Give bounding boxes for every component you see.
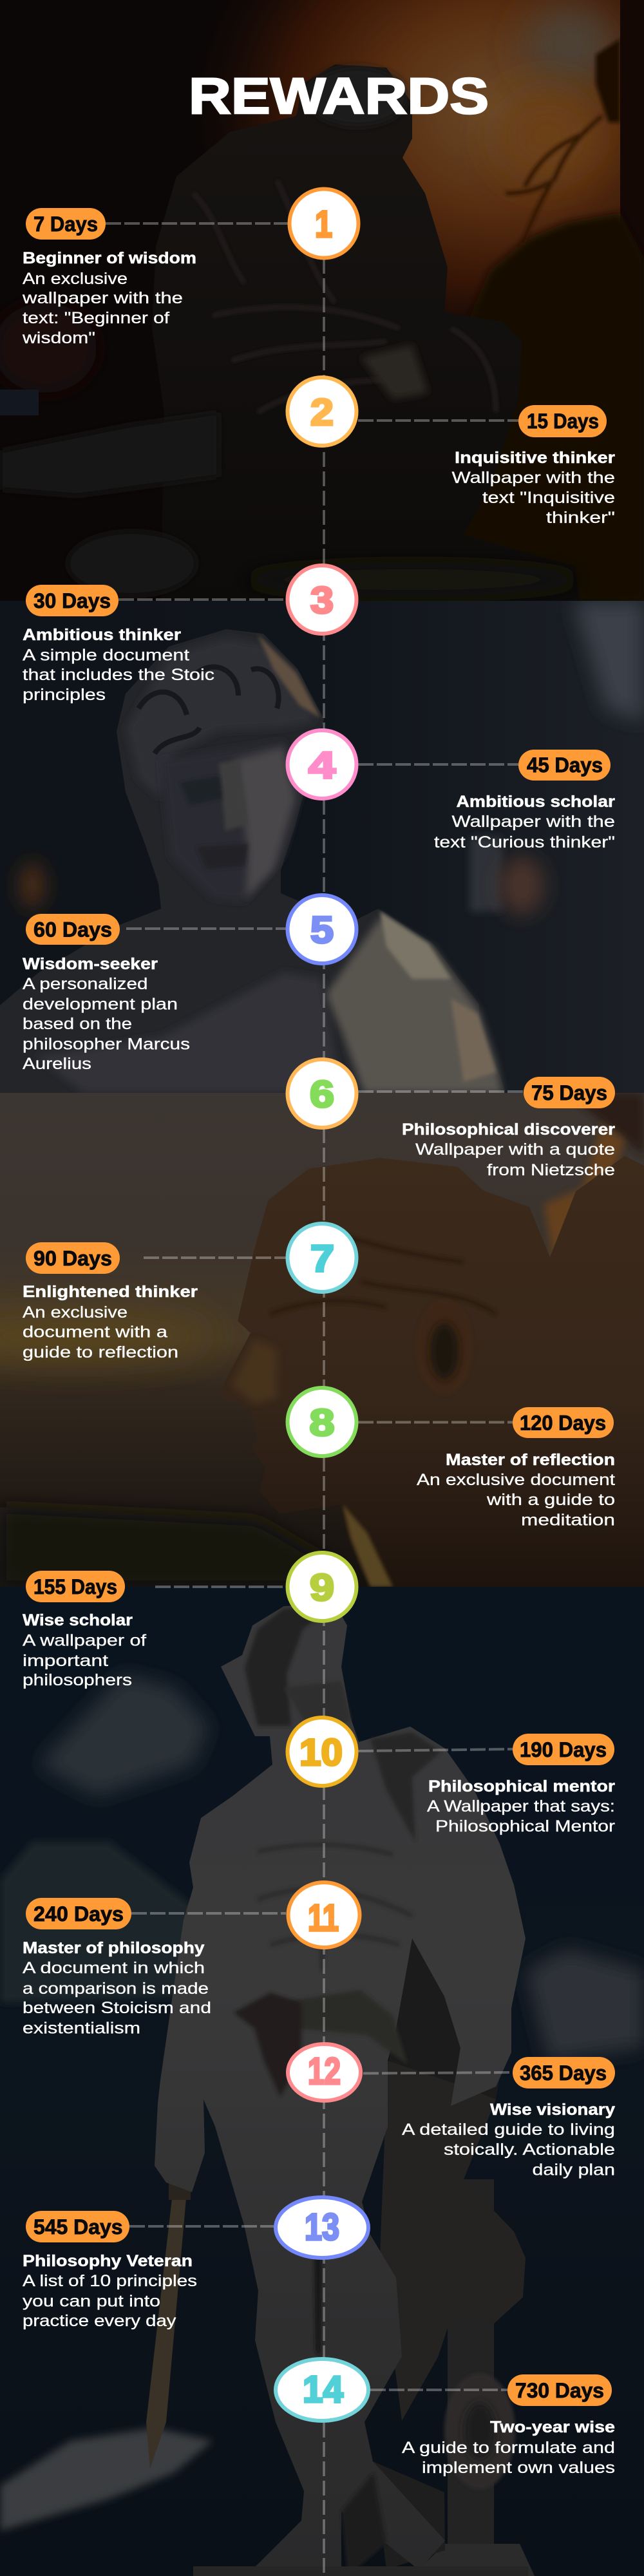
reward text: thinker" — [546, 509, 615, 527]
panel: background bust statue — [0, 601, 644, 1093]
reward text: guide to reflection — [23, 1343, 178, 1361]
reward 8 — [287, 1388, 615, 1529]
days pill: 240 Days — [33, 1902, 124, 1926]
reward text — [402, 1121, 615, 1179]
reward text: Philosophical mentor — [428, 1777, 615, 1795]
reward 10 — [287, 1718, 615, 1835]
reward text: stoically. Actionable — [444, 2141, 615, 2159]
reward text: A wallpaper of — [23, 1632, 146, 1650]
reward text — [23, 1611, 146, 1689]
reward text: A personalized — [23, 975, 148, 993]
days pill: 15 Days — [527, 410, 599, 433]
reward text — [427, 1777, 615, 1835]
reward text: Wise visionary — [490, 2101, 615, 2119]
reward text: A Wallpaper that says: — [427, 1797, 615, 1815]
reward 14 — [276, 2359, 615, 2477]
reward text — [22, 249, 196, 347]
reward text: Beginner of wisdom — [23, 249, 196, 267]
profile head statue — [0, 1156, 644, 1587]
bust statue — [0, 629, 506, 1093]
days pill — [26, 1898, 131, 1929]
seated statue figure — [152, 64, 580, 601]
reward text: Wisdom-seeker — [23, 955, 158, 973]
reward 6 — [287, 1059, 615, 1179]
reward text: Master of reflection — [446, 1451, 615, 1469]
milestone number: 2 — [310, 392, 334, 433]
milestone number — [289, 1882, 359, 1947]
column and drape — [373, 1900, 535, 2576]
reward text: A document in which — [23, 1959, 205, 1977]
reward text: A simple document — [23, 647, 189, 665]
reward text: implement own values — [422, 2459, 615, 2477]
days pill: 120 Days — [520, 1412, 606, 1435]
reward text: meditation — [521, 1511, 615, 1529]
reward text: Wise scholar — [23, 1611, 133, 1629]
reward 9 — [23, 1553, 357, 1689]
days pill — [518, 405, 607, 437]
days pill — [513, 1407, 614, 1438]
standing statue figure — [155, 1604, 526, 2576]
reward text: Philosophy Veteran — [23, 2252, 193, 2270]
milestone number — [287, 1059, 357, 1128]
milestone number: 1 — [315, 204, 332, 245]
reward text — [23, 955, 190, 1073]
reward text: Inquisitive thinker — [455, 449, 615, 467]
reward text: development plan — [23, 996, 178, 1014]
days pill — [524, 1077, 615, 1108]
reward text: An exclusive document — [417, 1471, 615, 1489]
reward text: a comparison is made — [23, 1980, 209, 1998]
milestone number — [287, 565, 357, 634]
milestone number: 6 — [310, 1074, 334, 1115]
panel: background profile head — [0, 1093, 644, 1587]
milestone number — [287, 1553, 357, 1621]
reward text: text "Inquisitive — [482, 489, 615, 507]
milestone number — [287, 895, 357, 963]
reward text: document with a — [23, 1323, 167, 1341]
reward text — [23, 626, 214, 704]
reward text: Aurelius — [23, 1055, 91, 1073]
title: REWARDS — [189, 67, 489, 124]
milestone number — [287, 1224, 357, 1292]
milestone number — [288, 2044, 361, 2101]
reward text: text "Curious thinker" — [434, 833, 615, 851]
days pill: 190 Days — [520, 1738, 607, 1761]
reward text — [23, 1939, 211, 2038]
days pill — [26, 2211, 129, 2242]
milestone number: 9 — [310, 1567, 334, 1609]
reward text: Two-year wise — [490, 2418, 615, 2436]
days pill: 45 Days — [527, 753, 603, 777]
reward text: Master of philosophy — [23, 1939, 205, 1957]
reward text — [417, 1451, 615, 1529]
milestone number: 4 — [308, 744, 336, 786]
days pill: 155 Days — [33, 1575, 117, 1598]
reward text: philosophers — [23, 1671, 132, 1689]
days pill: 60 Days — [33, 918, 112, 942]
milestone number — [276, 2197, 368, 2258]
reward text: daily plan — [532, 2161, 615, 2179]
days pill — [26, 1242, 120, 1274]
reward text: Ambitious scholar — [456, 793, 615, 811]
milestone number — [287, 377, 357, 446]
days pill: 30 Days — [33, 589, 111, 612]
days pill: 730 Days — [515, 2379, 604, 2402]
reward 11 — [23, 1882, 359, 2038]
milestone number: 7 — [310, 1238, 334, 1280]
reward 1 — [22, 189, 358, 347]
reward text — [23, 1283, 198, 1361]
milestone number — [287, 1718, 357, 1786]
reward text — [402, 2418, 615, 2477]
panel: background standing statue — [0, 1587, 644, 2576]
days pill — [513, 1734, 614, 1765]
reward text: principles — [23, 686, 106, 704]
reward text: existentialism — [23, 2020, 140, 2038]
reward 2 — [287, 377, 615, 527]
reward text: Enlightened thinker — [23, 1283, 198, 1301]
milestone number: 3 — [310, 580, 334, 621]
reward text: Wallpaper with a quote — [415, 1141, 615, 1159]
reward text: An exclusive — [23, 1303, 128, 1321]
reward text: wallpaper with the — [22, 289, 183, 307]
days pill — [26, 208, 106, 240]
reward 3 — [23, 565, 357, 704]
days pill — [26, 585, 118, 616]
reward text: Philosophical discoverer — [402, 1121, 615, 1139]
reward text: with a guide to — [486, 1491, 615, 1509]
days pill — [507, 2374, 612, 2406]
reward text: A detailed guide to living — [402, 2121, 615, 2139]
reward 12 — [288, 2044, 615, 2179]
days pill: 90 Days — [33, 1247, 112, 1270]
days pill — [518, 750, 611, 781]
reward text: based on the — [23, 1015, 132, 1033]
reward text: Wallpaper with the — [452, 469, 615, 487]
milestone number — [287, 730, 357, 799]
days pill: 545 Days — [33, 2215, 122, 2239]
reward text — [452, 449, 615, 527]
reward text: Ambitious thinker — [23, 626, 181, 644]
clouds — [0, 1674, 644, 2531]
milestone number — [276, 2359, 368, 2421]
milestone number: 13 — [305, 2206, 339, 2248]
reward text: between Stoicism and — [23, 1999, 211, 2017]
reward text — [23, 2252, 197, 2330]
reward text: from Nietzsche — [487, 1161, 615, 1179]
days pill — [26, 1571, 125, 1602]
reward 13 — [23, 2197, 368, 2330]
milestone number: 14 — [303, 2369, 343, 2410]
days pill: 75 Days — [531, 1081, 607, 1104]
timeline spine — [323, 259, 325, 2576]
reward text: A guide to formulate and — [402, 2439, 615, 2457]
reward 5 — [23, 895, 357, 1073]
reward text: wisdom" — [22, 329, 95, 347]
reward text: that includes the Stoic — [23, 666, 214, 684]
reward text: An exclusive — [23, 270, 128, 288]
rubble — [0, 390, 580, 596]
reward text: Wallpaper with the — [452, 813, 615, 831]
reward text: text: "Beginner of — [23, 309, 169, 327]
reward 7 — [23, 1224, 357, 1361]
reward text: you can put into — [23, 2293, 160, 2311]
sword — [146, 2177, 191, 2468]
days pill: 365 Days — [520, 2061, 607, 2085]
milestone number: 12 — [308, 2050, 341, 2092]
reward 4 — [287, 730, 615, 851]
panel: background seated statue — [0, 0, 644, 601]
milestone number: 11 — [308, 1897, 339, 1939]
reward text — [434, 793, 615, 851]
milestone number: 10 — [299, 1732, 343, 1774]
reward text: practice every day — [23, 2312, 176, 2330]
milestone number — [290, 189, 358, 258]
milestone number: 5 — [310, 909, 334, 951]
days pill: 7 Days — [33, 213, 98, 236]
reward text: important — [23, 1652, 108, 1670]
milestone number: 8 — [309, 1402, 335, 1444]
reward text: philosopher Marcus — [23, 1036, 190, 1054]
reward text — [402, 2101, 615, 2179]
milestone number — [287, 1388, 357, 1456]
reward text: Philosophical Mentor — [435, 1817, 615, 1835]
reward text: A list of 10 principles — [23, 2272, 197, 2290]
days pill — [26, 914, 120, 945]
days pill — [513, 2057, 615, 2088]
